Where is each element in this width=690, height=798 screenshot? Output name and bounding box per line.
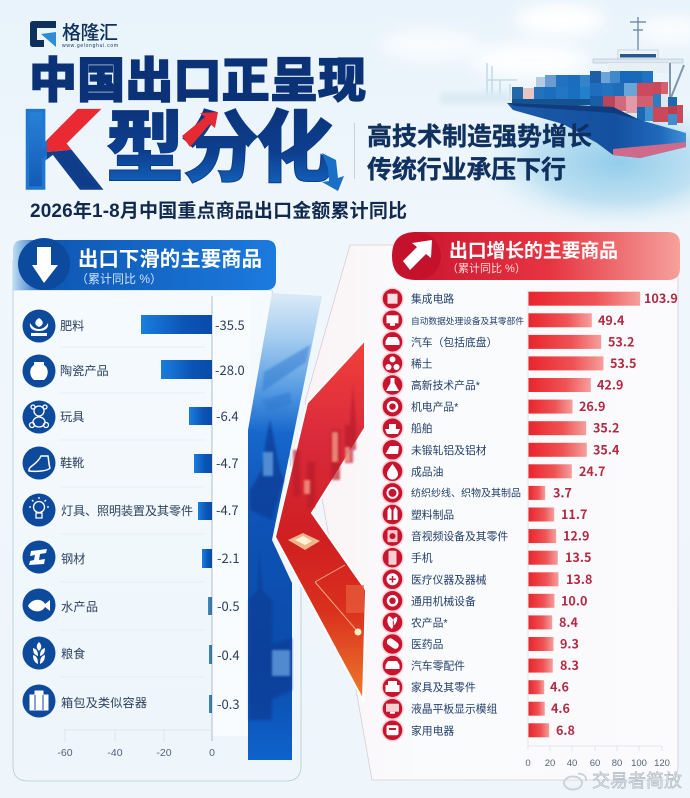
panel header: （累计同比 %） bbox=[447, 262, 526, 275]
row: 集成电路: 集成电路 bbox=[411, 292, 454, 306]
row: 陶瓷产品: -28.0 bbox=[215, 360, 245, 379]
row: 自动数据处理设备及其零部件 bbox=[382, 310, 625, 331]
center graphic: blue city strip bbox=[248, 293, 322, 760]
axis: 120 bbox=[654, 758, 670, 769]
row: 稀土: 稀土 bbox=[411, 357, 433, 370]
row: 陶瓷产品: 陶瓷产品 bbox=[60, 363, 109, 378]
row: 船舶: 35.2 bbox=[593, 418, 619, 437]
row: 高新技术产品*: 高新技术产品* bbox=[411, 378, 481, 392]
row: 音视频设备及其零件: 12.9 bbox=[563, 526, 589, 545]
row: 粮食: -0.4 bbox=[217, 645, 240, 664]
row: 集成电路: 103.9 bbox=[644, 288, 678, 307]
row: 通用机械设备 bbox=[382, 590, 587, 611]
row: 成品油 bbox=[382, 461, 605, 482]
row: 肥料: -35.5 bbox=[215, 315, 245, 334]
center graphic: red K shape bbox=[275, 340, 366, 700]
logo: 格隆汇: 格隆汇 bbox=[62, 22, 118, 44]
axis: -60 bbox=[57, 747, 73, 759]
subtitle: 高技术制造强势增长 bbox=[367, 123, 592, 151]
row: 成品油: 成品油 bbox=[411, 464, 443, 478]
row: 农产品*: 8.4 bbox=[559, 612, 579, 631]
axis bbox=[57, 296, 215, 759]
row: 肥料: 肥料 bbox=[60, 319, 84, 333]
row: 高新技术产品*: 42.9 bbox=[597, 374, 623, 394]
row: 液晶平板显示模组: 4.6 bbox=[551, 698, 570, 717]
row: 成品油: 24.7 bbox=[579, 461, 605, 480]
row: 稀土: 53.5 bbox=[610, 353, 636, 372]
row: 医疗仪器及器械 bbox=[382, 569, 592, 590]
row: 玩具: 玩具 bbox=[60, 410, 84, 424]
axis: 60 bbox=[590, 758, 600, 769]
panel header: （累计同比 %） bbox=[76, 272, 162, 286]
row: 灯具、照明装置及其零件: 灯具、照明装置及其零件 bbox=[61, 504, 193, 518]
icon: logo mark bbox=[30, 21, 56, 47]
row: 通用机械设备: 10.0 bbox=[561, 590, 587, 609]
panel header: 出口增长的主要商品 bbox=[449, 240, 618, 262]
panel body bbox=[13, 260, 301, 781]
row: 机电产品*: 机电产品* bbox=[411, 400, 459, 414]
icon: weibo bbox=[564, 774, 586, 790]
row: 音视频设备及其零件: 音视频设备及其零件 bbox=[411, 529, 508, 543]
value column bbox=[212, 296, 250, 736]
red skyline towers bbox=[293, 385, 356, 508]
row: 塑料制品: 11.7 bbox=[561, 504, 587, 523]
row: 汽车零配件: 汽车零配件 bbox=[411, 659, 465, 673]
row: 灯具、照明装置及其零件: -4.7 bbox=[216, 500, 239, 519]
letter K: K bbox=[20, 87, 101, 212]
row: 纺织纱线、织物及其制品 bbox=[382, 482, 572, 503]
row: 纺织纱线、织物及其制品: 纺织纱线、织物及其制品 bbox=[411, 487, 521, 500]
row: 鞋靴: -4.7 bbox=[216, 453, 239, 472]
axis: 20 bbox=[545, 758, 555, 769]
row: 医疗仪器及器械: 医疗仪器及器械 bbox=[411, 572, 487, 586]
letter K: K bbox=[20, 87, 101, 212]
row: 集成电路 bbox=[382, 288, 678, 309]
row: 塑料制品: 塑料制品 bbox=[411, 508, 454, 522]
row: 手机: 13.5 bbox=[565, 547, 591, 566]
row: 钢材: -2.1 bbox=[217, 548, 240, 567]
row: 医药品: 9.3 bbox=[560, 634, 579, 652]
row: 水产品: -0.5 bbox=[217, 596, 240, 615]
row: 灯具、照明装置及其零件 bbox=[22, 494, 239, 526]
logo: 格隆汇: www.gelonghui.com bbox=[62, 43, 118, 49]
row: 水产品 bbox=[22, 588, 240, 622]
row: 手机: 手机 bbox=[411, 551, 433, 565]
row: 汽车（包括底盘）: 53.2 bbox=[608, 331, 634, 350]
panel: exports declining bbox=[13, 238, 301, 781]
panel header bbox=[13, 238, 276, 290]
chart subtitle: 2026年1-8月中国重点商品出口金额累计同比 bbox=[30, 199, 407, 222]
title line 2: K型分化: 型分化 bbox=[106, 104, 334, 192]
row: 汽车零配件 bbox=[382, 655, 579, 676]
row: 手机 bbox=[382, 547, 591, 568]
row: 高新技术产品* bbox=[382, 374, 623, 396]
axis: 0 bbox=[209, 747, 215, 759]
row: 船舶 bbox=[382, 418, 619, 439]
port skyline (upper strip) bbox=[262, 345, 310, 412]
row: 未锻轧铝及铝材: 35.4 bbox=[593, 439, 620, 458]
axis: 40 bbox=[567, 758, 577, 769]
row: 农产品* bbox=[382, 612, 579, 633]
row: 家用电器: 6.8 bbox=[556, 720, 575, 739]
row: 机电产品* bbox=[382, 396, 605, 417]
axis: -40 bbox=[107, 747, 123, 759]
row: 未锻轧铝及铝材: 未锻轧铝及铝材 bbox=[411, 443, 487, 457]
title line 2: K型分化 bbox=[26, 107, 344, 191]
letter K bbox=[26, 108, 104, 190]
subtitle: 传统行业承压下行 bbox=[367, 156, 566, 184]
row: 鞋靴 bbox=[22, 446, 239, 480]
panel header: 出口下滑的主要商品 bbox=[78, 248, 262, 271]
axis: 100 bbox=[631, 758, 647, 769]
divider bbox=[354, 123, 355, 179]
row: 音视频设备及其零件 bbox=[382, 526, 589, 547]
background: sky clouds and sea bbox=[380, 4, 690, 235]
ship hull bbox=[507, 103, 686, 158]
row: 钢材: 钢材 bbox=[61, 552, 85, 566]
panel: exports growing bbox=[305, 232, 680, 780]
row: 液晶平板显示模组 bbox=[382, 698, 570, 719]
axis: 80 bbox=[612, 758, 622, 769]
icon: up arrow bbox=[393, 232, 441, 280]
row: 家用电器 bbox=[382, 720, 575, 741]
logo: 格隆汇 bbox=[30, 21, 118, 49]
arrow: blue down bbox=[322, 153, 344, 191]
letter K: K bbox=[20, 87, 101, 212]
row separators bbox=[60, 347, 205, 677]
row: 未锻轧铝及铝材 bbox=[382, 439, 620, 460]
row: 船舶: 船舶 bbox=[411, 421, 433, 435]
row: 家用电器: 家用电器 bbox=[411, 723, 454, 737]
axis: 0 bbox=[525, 758, 531, 769]
row: 医药品: 医药品 bbox=[411, 638, 443, 651]
row: 陶瓷产品 bbox=[22, 354, 245, 388]
circuit chip bbox=[288, 533, 364, 636]
ship mast and bridge bbox=[593, 17, 684, 100]
axis bbox=[525, 290, 670, 769]
row: 机电产品*: 26.9 bbox=[579, 396, 605, 415]
row: 医药品 bbox=[382, 634, 579, 654]
icon: container ship bbox=[507, 17, 686, 158]
row: 粮食: 粮食 bbox=[61, 646, 85, 661]
blue skyline towers bbox=[249, 420, 292, 720]
row: 水产品: 水产品 bbox=[61, 600, 98, 614]
row: 玩具 bbox=[22, 400, 239, 434]
row: 家具及其零件 bbox=[382, 677, 569, 698]
row: 箱包及类似容器 bbox=[22, 684, 240, 718]
row: 塑料制品 bbox=[382, 504, 587, 525]
row: 自动数据处理设备及其零部件: 自动数据处理设备及其零部件 bbox=[411, 315, 524, 326]
arrow: red up bbox=[182, 112, 218, 147]
row: 汽车（包括底盘） bbox=[382, 331, 634, 352]
title line 1: 中国出口正呈现 bbox=[29, 55, 366, 108]
row: 肥料 bbox=[22, 310, 245, 342]
row: 家具及其零件: 4.6 bbox=[550, 677, 569, 696]
row: 家具及其零件: 家具及其零件 bbox=[411, 680, 476, 694]
row: 通用机械设备: 通用机械设备 bbox=[411, 594, 476, 608]
ship containers bbox=[512, 71, 683, 125]
row: 鞋靴: 鞋靴 bbox=[60, 455, 84, 470]
watermark: 交易者简放 bbox=[592, 771, 682, 791]
row: 农产品*: 农产品* bbox=[411, 615, 448, 629]
row: 液晶平板显示模组: 液晶平板显示模组 bbox=[411, 702, 498, 716]
panel body bbox=[305, 245, 678, 780]
axis: -20 bbox=[156, 747, 172, 759]
row: 箱包及类似容器: -0.3 bbox=[217, 694, 240, 713]
row: 医疗仪器及器械: 13.8 bbox=[566, 569, 592, 588]
subtitle bbox=[367, 123, 592, 184]
panel header bbox=[392, 232, 680, 280]
row: 稀土 bbox=[382, 353, 636, 374]
row: 钢材 bbox=[22, 540, 240, 574]
row: 玩具: -6.4 bbox=[216, 406, 239, 425]
row: 自动数据处理设备及其零部件: 49.4 bbox=[598, 310, 625, 329]
icon: down arrow bbox=[18, 238, 70, 290]
row: 箱包及类似容器: 箱包及类似容器 bbox=[61, 695, 147, 710]
row: 汽车（包括底盘）: 汽车（包括底盘） bbox=[411, 335, 497, 349]
row: 汽车零配件: 8.3 bbox=[560, 655, 579, 674]
row: 粮食 bbox=[22, 636, 240, 670]
row: 纺织纱线、织物及其制品: 3.7 bbox=[553, 482, 572, 501]
